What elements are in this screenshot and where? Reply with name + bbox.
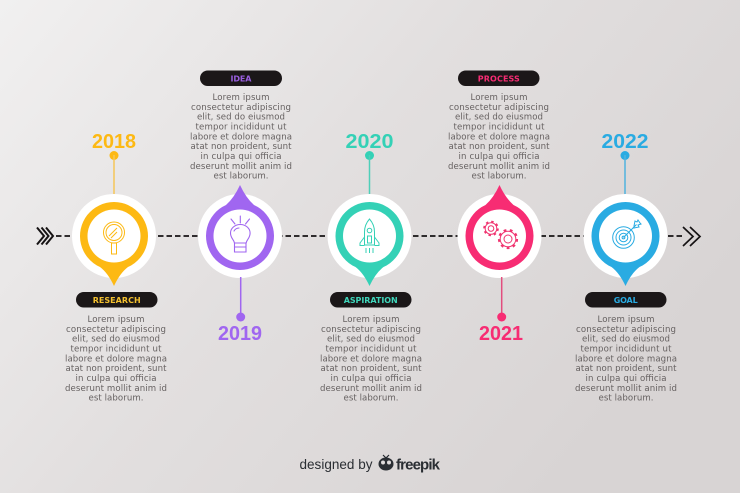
text block aspiration: deserunt mollit anim id: [320, 384, 422, 394]
text block process: elit, sed do eiusmod: [455, 113, 543, 123]
text block idea: [190, 93, 292, 182]
milestone 2019: [190, 70, 292, 345]
pill goal: GOAL: [614, 296, 638, 305]
text block goal: tempor incididunt ut: [580, 344, 672, 354]
text block idea: labore et dolore magna: [190, 132, 292, 142]
year 2020: 2020: [346, 130, 394, 153]
text block goal: elit, sed do eiusmod: [582, 335, 670, 345]
text block idea: atat non proident, sunt: [190, 142, 292, 152]
marker pin goal: [584, 194, 668, 286]
text block aspiration: in culpa qui officia: [330, 374, 412, 384]
footer credit: freepik: [396, 456, 441, 474]
text block idea: in culpa qui officia: [200, 152, 282, 162]
pill aspiration: ASPIRATION: [344, 296, 398, 305]
marker pin research: [72, 194, 156, 286]
text block aspiration: [320, 315, 422, 404]
text block research: in culpa qui officia: [76, 374, 156, 384]
text block idea: est laborum.: [214, 172, 268, 182]
icon: freepik logo: [378, 455, 394, 470]
year 2021: 2021: [479, 322, 523, 345]
text block aspiration: atat non proident, sunt: [320, 364, 422, 374]
icon: gears: [484, 222, 517, 248]
icon: left arrow tail: [37, 228, 53, 244]
text block research: Lorem ipsum: [88, 315, 144, 325]
milestone 2022: [575, 130, 677, 404]
text block research: [65, 315, 167, 404]
text block process: in culpa qui officia: [458, 152, 540, 162]
text block aspiration: Lorem ipsum: [342, 315, 400, 325]
footer credit: [300, 455, 441, 474]
text block goal: consectetur adipiscing: [576, 325, 676, 335]
text block aspiration: elit, sed do eiusmod: [327, 335, 415, 345]
text block process: deserunt mollit anim id: [448, 162, 550, 172]
icon: target: [613, 220, 641, 248]
footer credit: designed by: [300, 457, 373, 472]
text block process: Lorem ipsum: [470, 93, 528, 103]
text block goal: deserunt mollit anim id: [575, 384, 677, 394]
text block research: atat non proident, sunt: [66, 364, 167, 374]
milestone 2021: [448, 70, 550, 345]
pill goal: [585, 292, 666, 308]
text block goal: labore et dolore magna: [575, 354, 677, 364]
text block idea: elit, sed do eiusmod: [197, 113, 285, 123]
icon: right arrow head: [683, 227, 700, 246]
connector 2021: [497, 277, 506, 322]
pill idea: IDEA: [230, 74, 252, 84]
text block process: consectetur adipiscing: [449, 103, 549, 113]
text block research: deserunt mollit anim id: [65, 384, 167, 394]
connector 2020: [365, 151, 374, 195]
text block process: [448, 93, 550, 182]
text block process: tempor incididunt ut: [454, 122, 545, 132]
marker pin idea: [198, 185, 282, 278]
text block goal: Lorem ipsum: [598, 315, 654, 325]
year 2022: 2022: [602, 130, 648, 153]
pill process: [458, 70, 540, 86]
connector 2022: [620, 151, 630, 195]
milestone 2020: [320, 130, 422, 404]
text block aspiration: labore et dolore magna: [320, 354, 422, 364]
connector 2018: [110, 151, 118, 195]
text block process: atat non proident, sunt: [448, 142, 550, 152]
year 2019: 2019: [218, 322, 262, 345]
milestone 2018: [65, 130, 167, 404]
text block goal: in culpa qui officia: [586, 374, 666, 384]
text block goal: [575, 315, 677, 404]
text block research: est laborum.: [88, 394, 144, 404]
pill research: RESEARCH: [93, 296, 141, 305]
marker pin aspiration: [328, 194, 412, 286]
text block aspiration: est laborum.: [344, 394, 398, 404]
text block idea: deserunt mollit anim id: [190, 162, 292, 172]
text block goal: atat non proident, sunt: [576, 364, 677, 374]
icon: rocket: [360, 219, 379, 253]
text block research: labore et dolore magna: [65, 354, 167, 364]
pill aspiration: [330, 292, 412, 308]
icon: light bulb: [230, 216, 250, 252]
text block research: elit, sed do eiusmod: [72, 335, 160, 345]
text block aspiration: consectetur adipiscing: [321, 325, 421, 335]
text block idea: tempor incididunt ut: [196, 122, 287, 132]
text block research: tempor incididunt ut: [70, 344, 162, 354]
text block aspiration: tempor incididunt ut: [326, 344, 417, 354]
text block goal: est laborum.: [598, 394, 654, 404]
text block process: est laborum.: [472, 172, 526, 182]
year 2018: 2018: [92, 130, 136, 153]
pill process: PROCESS: [478, 74, 520, 84]
text block research: consectetur adipiscing: [66, 325, 166, 335]
icon: magnifier: [104, 222, 124, 254]
connector 2019: [236, 277, 245, 322]
timeline dashed line: [56, 235, 682, 237]
text block process: labore et dolore magna: [448, 132, 550, 142]
marker pin process: [458, 185, 542, 278]
text block idea: consectetur adipiscing: [191, 103, 291, 113]
pill research: [76, 292, 158, 308]
text block idea: Lorem ipsum: [212, 93, 270, 103]
pill idea: [200, 70, 282, 86]
